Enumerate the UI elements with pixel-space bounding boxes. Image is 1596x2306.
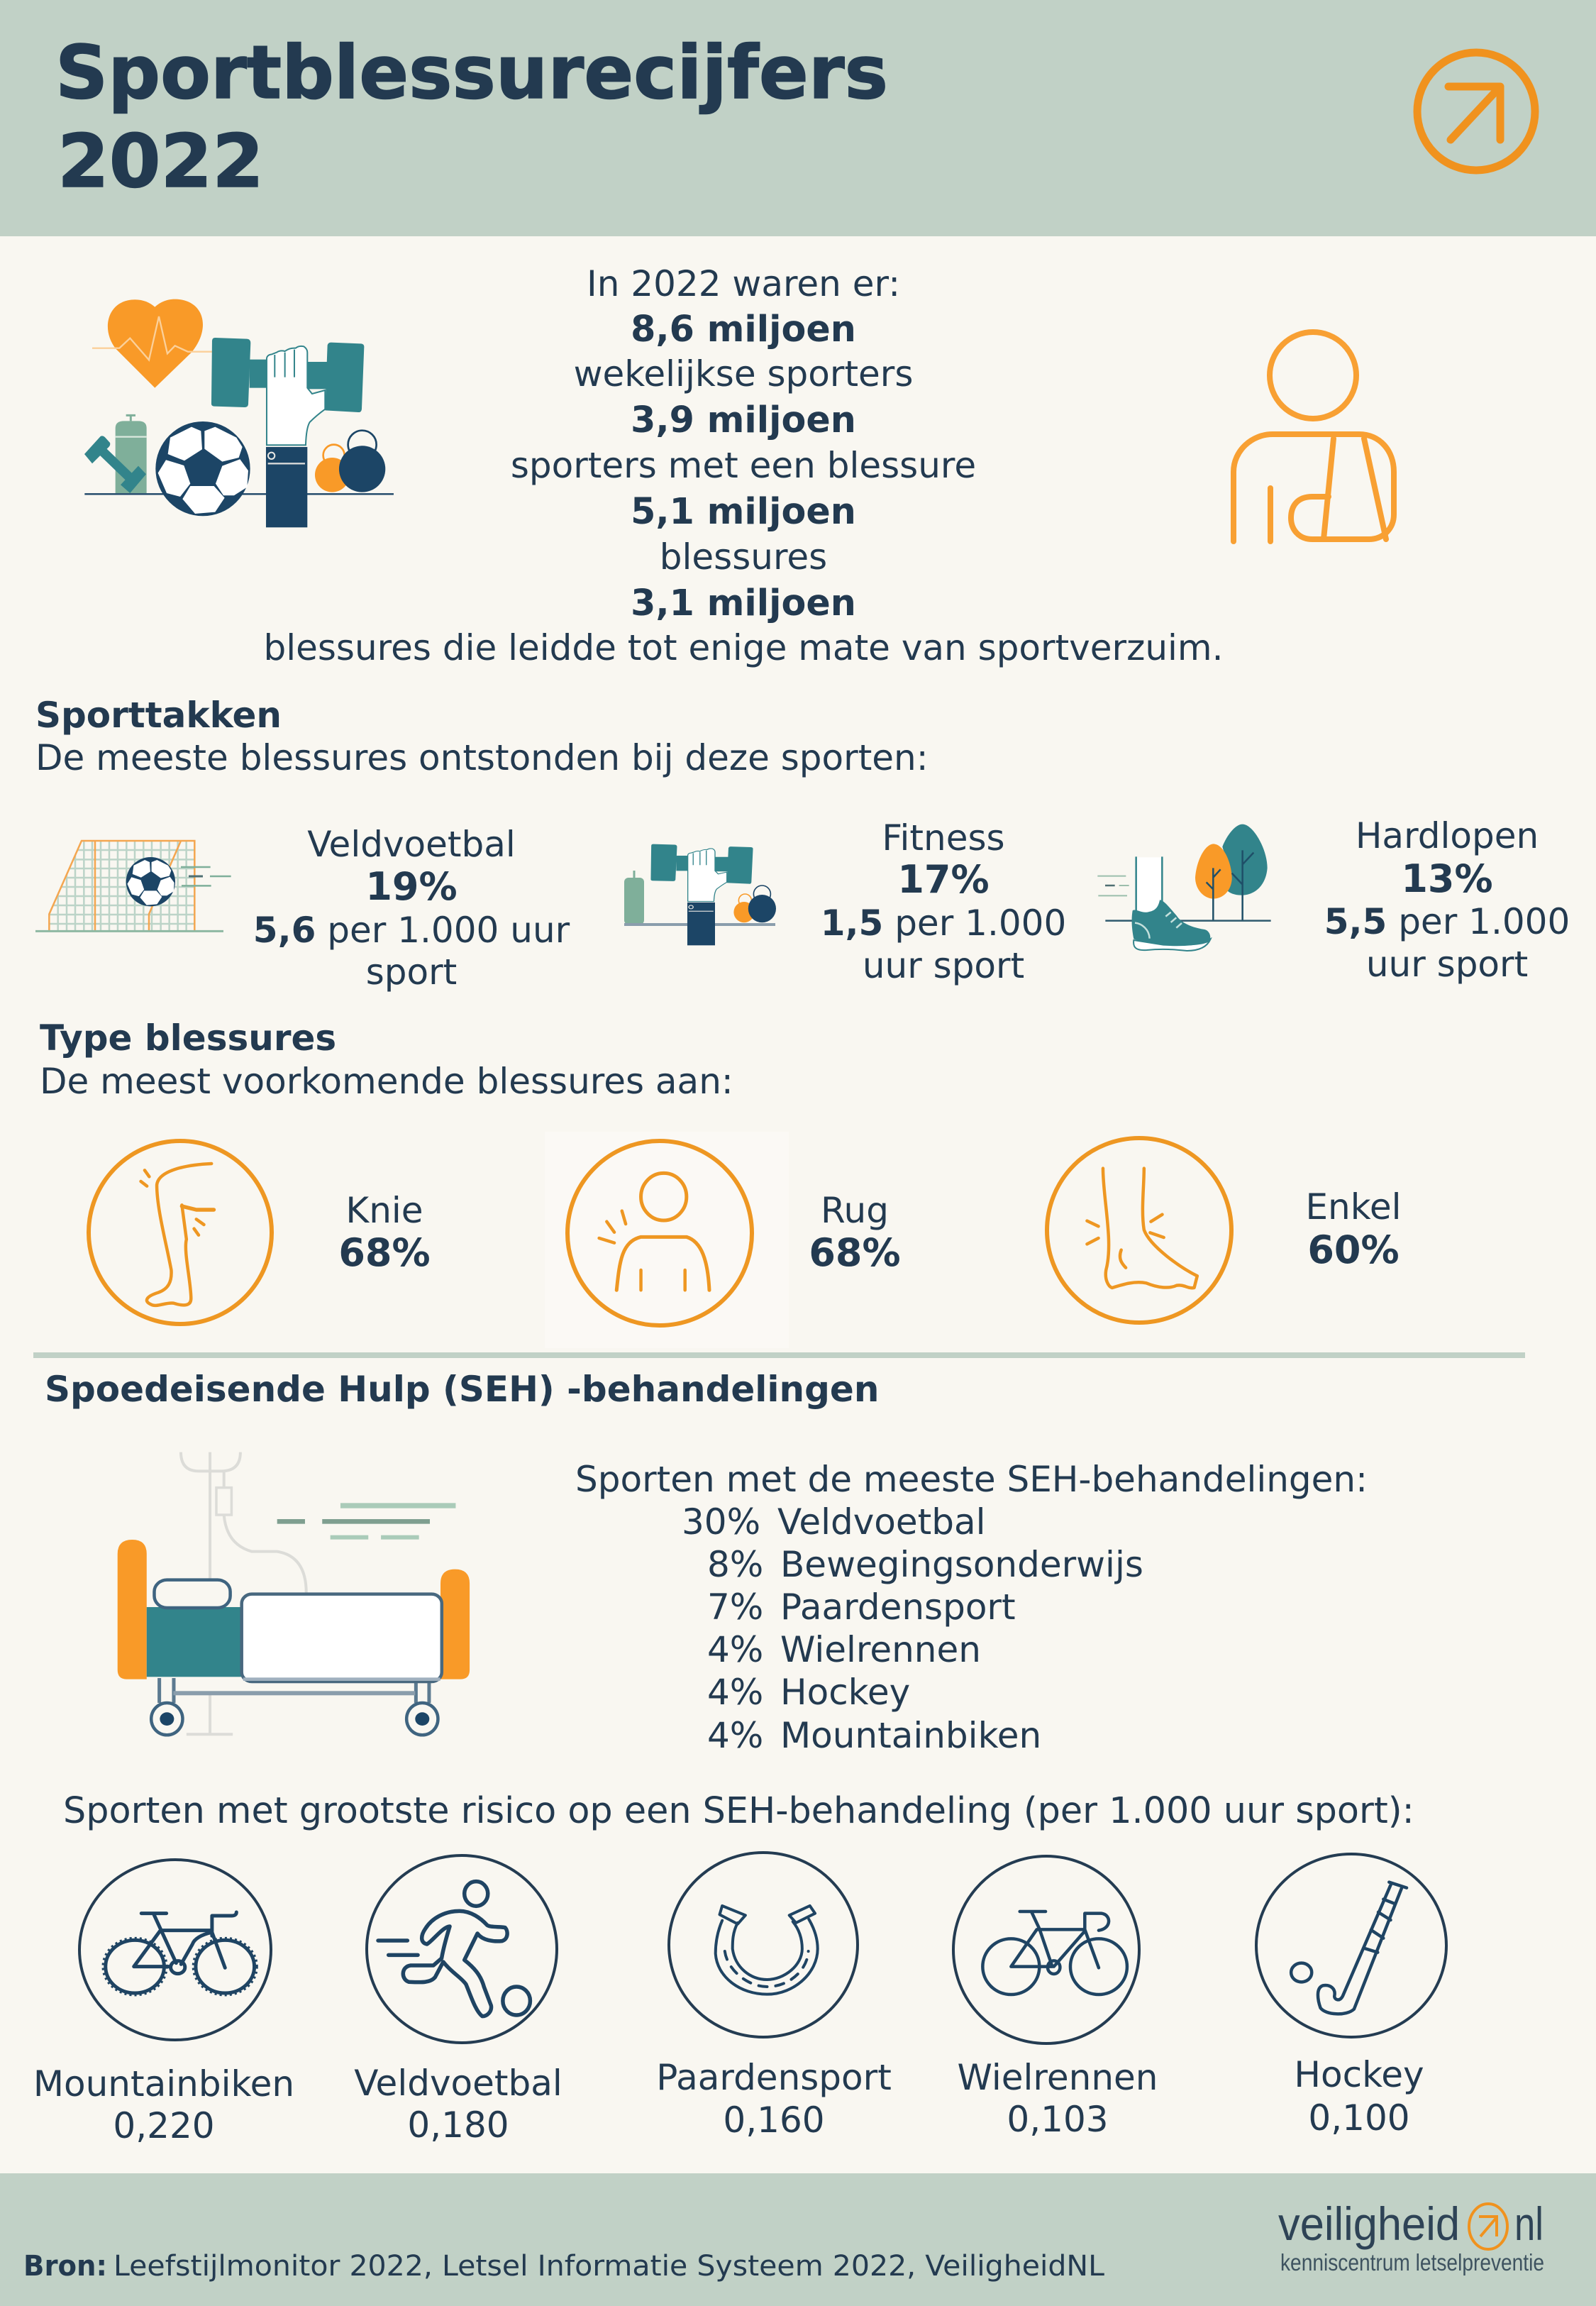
icon: road bike bbox=[953, 1856, 1139, 2043]
logo: VeiligheidNL: veiligheid bbox=[1278, 2197, 1460, 2250]
text: key figures: 3,1 miljoen bbox=[631, 582, 856, 624]
panel: Spoedeisende Hulp bbox=[33, 1369, 1446, 2146]
text: highest risk heading: Sporten met grootste risico op een SEH-behandeling (per 1.000 uur sport): bbox=[63, 1789, 1414, 1831]
heading: Type blessures: De meest voorkomende blessures aan: bbox=[40, 1061, 733, 1102]
icon: football in goal bbox=[35, 841, 231, 931]
icon: person with arm sling bbox=[1234, 332, 1394, 541]
icon: fitness bbox=[624, 844, 776, 945]
text: key figures: blessures bbox=[660, 536, 827, 578]
logo: VeiligheidNL: nl bbox=[1514, 2197, 1544, 2250]
text: sports with most treatments: Mountainbiken bbox=[780, 1715, 1041, 1756]
text: sports with most treatments: Wielrennen bbox=[780, 1629, 981, 1670]
title bbox=[55, 31, 888, 204]
text: Fitness: 1,5 per 1.000 bbox=[821, 903, 1066, 944]
label: Hockey: 0,100 bbox=[1308, 2097, 1410, 2139]
heading: Type blessures: Type blessures bbox=[40, 1017, 336, 1059]
icon: back bbox=[545, 1132, 789, 1348]
label: Veldvoetbal: Veldvoetbal bbox=[354, 2063, 563, 2104]
label: Mountainbiken bbox=[33, 2063, 294, 2146]
text: Veldvoetbal bbox=[253, 824, 570, 993]
panel: Type blessures bbox=[40, 1017, 1402, 1348]
text: Rug bbox=[809, 1190, 901, 1275]
text: Veldvoetbal: sport bbox=[366, 951, 457, 993]
text: Fitness: Fitness bbox=[882, 817, 1005, 859]
label: Paardensport: 0,160 bbox=[723, 2100, 825, 2141]
text: Enkel bbox=[1305, 1186, 1402, 1272]
icon: hospital bed bbox=[118, 1452, 470, 1735]
heading: Type blessures bbox=[40, 1017, 733, 1102]
label: Wielrennen: Wielrennen bbox=[958, 2057, 1158, 2098]
text: sports with most treatments: Sporten met de meeste SEH-behandelingen: bbox=[575, 1459, 1368, 1500]
text: Hardlopen: 5,5 per 1.000 bbox=[1324, 901, 1570, 942]
text: key figures: 3,9 miljoen bbox=[631, 399, 856, 441]
text: key figures: 5,1 miljoen bbox=[631, 490, 856, 532]
label: Paardensport bbox=[656, 2057, 892, 2141]
text: Enkel: Enkel bbox=[1305, 1186, 1402, 1228]
heading: Spoedeisende Hulp: Spoedeisende Hulp (SEH) -behandelingen bbox=[45, 1369, 879, 1410]
text: Hardlopen: uur sport bbox=[1366, 944, 1528, 985]
text: Veldvoetbal: 5,6 per 1.000 uur bbox=[253, 910, 570, 951]
icon: sports collage bbox=[84, 299, 394, 527]
panel: intro bbox=[84, 263, 1394, 668]
label: Paardensport: Paardensport bbox=[656, 2057, 892, 2098]
text: Knie: 68% bbox=[338, 1230, 431, 1275]
text: sports with most treatments bbox=[575, 1459, 1368, 1756]
text: key figures bbox=[263, 263, 1224, 668]
text: Fitness bbox=[821, 817, 1066, 986]
label: Mountainbiken: Mountainbiken bbox=[33, 2063, 294, 2104]
heading: Sporttakken bbox=[35, 695, 929, 778]
icon: ankle bbox=[1047, 1138, 1231, 1323]
panel: Sporttakken bbox=[35, 695, 1570, 993]
text: sports with most treatments: Bewegingsonderwijs bbox=[780, 1544, 1143, 1585]
text: Rug: 68% bbox=[809, 1230, 901, 1275]
text: sports with most treatments: 30% bbox=[682, 1501, 760, 1543]
label: Veldvoetbal: 0,180 bbox=[407, 2104, 509, 2146]
icon: arrow in circle logo bbox=[1417, 53, 1535, 170]
text: Veldvoetbal: Veldvoetbal bbox=[307, 824, 516, 865]
text: Fitness: 17% bbox=[897, 857, 990, 902]
text: sports with most treatments: Hockey bbox=[780, 1672, 910, 1713]
heading: Sporttakken: De meeste blessures ontstonden bij deze sporten: bbox=[35, 737, 929, 778]
icon: hockey stick bbox=[1256, 1854, 1446, 2037]
text: key figures: wekelijkse sporters bbox=[574, 353, 913, 395]
header band bbox=[0, 0, 1596, 236]
text: Hardlopen: 13% bbox=[1401, 856, 1493, 901]
icon: running shoe and trees bbox=[1097, 824, 1271, 951]
text: source: Bron: bbox=[23, 2250, 107, 2283]
text: sports with most treatments: 4% bbox=[707, 1672, 763, 1713]
heading: Sporttakken: Sporttakken bbox=[35, 695, 282, 736]
label: Mountainbiken: 0,220 bbox=[113, 2105, 215, 2146]
title: 2022 bbox=[57, 119, 264, 204]
title: Sportblessurecijfers bbox=[55, 31, 888, 116]
text: sports with most treatments: 8% bbox=[707, 1544, 763, 1585]
logo: VeiligheidNL bbox=[1278, 2197, 1544, 2275]
icon: football player bbox=[367, 1855, 557, 2043]
text: Hardlopen bbox=[1324, 815, 1570, 985]
text: Knie bbox=[338, 1190, 431, 1275]
text: key figures: 8,6 miljoen bbox=[631, 308, 856, 350]
icon: horseshoe bbox=[669, 1853, 858, 2037]
text: Enkel: 60% bbox=[1307, 1228, 1400, 1272]
footer band bbox=[0, 2173, 1596, 2306]
label: Hockey: Hockey bbox=[1294, 2054, 1424, 2095]
text: key figures: In 2022 waren er: bbox=[587, 263, 900, 304]
text: Rug: Rug bbox=[821, 1190, 889, 1231]
icon: mountainbike bbox=[79, 1860, 271, 2040]
text: Veldvoetbal: 19% bbox=[365, 864, 458, 909]
text: Fitness: uur sport bbox=[863, 945, 1024, 986]
text: Hardlopen: Hardlopen bbox=[1356, 815, 1539, 856]
text: key figures: blessures die leidde tot enige mate van sportverzuim. bbox=[263, 627, 1224, 668]
logo: VeiligheidNL: kenniscentrum letselpreventie bbox=[1280, 2249, 1544, 2275]
text: sports with most treatments: Paardensport bbox=[780, 1587, 1016, 1628]
text: Knie: Knie bbox=[345, 1190, 423, 1231]
label: Wielrennen bbox=[958, 2057, 1158, 2140]
icon: knee bbox=[89, 1141, 272, 1324]
text: sports with most treatments: 7% bbox=[707, 1587, 763, 1628]
text: source: Leefstijlmonitor 2022, Letsel Informatie Systeem 2022, VeiligheidNL bbox=[113, 2250, 1105, 2283]
text: sports with most treatments: 4% bbox=[707, 1715, 763, 1756]
label: Hockey bbox=[1294, 2054, 1424, 2139]
text: key figures: sporters met een blessure bbox=[511, 445, 976, 486]
label: Wielrennen: 0,103 bbox=[1007, 2099, 1109, 2140]
label: Veldvoetbal bbox=[354, 2063, 563, 2146]
text: sports with most treatments: 4% bbox=[707, 1629, 763, 1670]
text: sports with most treatments: Veldvoetbal bbox=[777, 1501, 986, 1543]
